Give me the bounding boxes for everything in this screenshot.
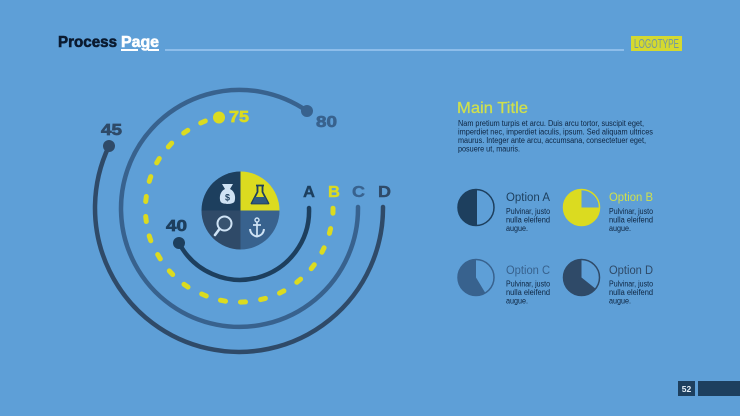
value labels: 45 [101, 122, 122, 139]
value labels [101, 109, 337, 235]
option C: augue. [506, 296, 528, 306]
series letters: D [378, 184, 391, 201]
option D: Pulvinar, justo [609, 280, 654, 288]
option D: augue. [609, 296, 631, 306]
central pie [202, 172, 280, 250]
body text: posuere ut, mauris. [458, 144, 520, 154]
option B: Pulvinar, justo [609, 207, 654, 216]
option C: nulla eleifend [506, 288, 550, 297]
arc A [173, 208, 309, 280]
icon: flask [252, 186, 268, 204]
logo [631, 36, 682, 51]
arc B dashed [146, 112, 333, 302]
value labels: 80 [316, 114, 337, 131]
option C: Option C [506, 265, 550, 277]
arc C [121, 90, 358, 327]
option A: nulla eleifend [506, 216, 550, 224]
option D: nulla eleifend [609, 288, 653, 297]
logo: LOGOTYPE [634, 37, 679, 51]
option B: Option B [609, 192, 653, 204]
value labels: 75 [229, 109, 249, 126]
title: Process [58, 34, 117, 51]
option D [564, 260, 654, 306]
option B: augue. [609, 224, 631, 233]
option B [564, 190, 654, 233]
value labels: 40 [166, 218, 187, 235]
body text: Nam pretium turpis et arcu. Duis arcu tortor, suscipit eget, [458, 119, 644, 128]
icon: magnifier [215, 216, 232, 235]
title: Page [121, 34, 159, 51]
series letters: B [328, 184, 340, 201]
option A: Pulvinar, justo [506, 207, 551, 216]
body text [458, 119, 653, 154]
option C: Pulvinar, justo [506, 280, 551, 288]
body text: maurus. Integer ante arcu, accumsana, consectetuer eget, [458, 136, 646, 145]
option B: nulla eleifend [609, 216, 653, 224]
option C [458, 260, 551, 306]
title [58, 34, 159, 51]
series letters [303, 184, 391, 201]
footer bar [698, 381, 740, 396]
series letters: C [352, 184, 365, 201]
arc D [95, 140, 383, 352]
option A [458, 190, 551, 233]
icon: money bag: $ [225, 192, 230, 202]
icon: anchor [250, 218, 264, 236]
option A: Option A [506, 192, 550, 204]
series letters: A [303, 184, 315, 201]
option A: augue. [506, 224, 528, 233]
body text: imperdiet nec, imperdiet iaculis, ipsum. Sed aliquam ultrices [458, 128, 653, 136]
page number [678, 381, 695, 396]
main title: Main Title [457, 100, 528, 117]
page number: 52 [682, 384, 691, 394]
option D: Option D [609, 265, 653, 277]
